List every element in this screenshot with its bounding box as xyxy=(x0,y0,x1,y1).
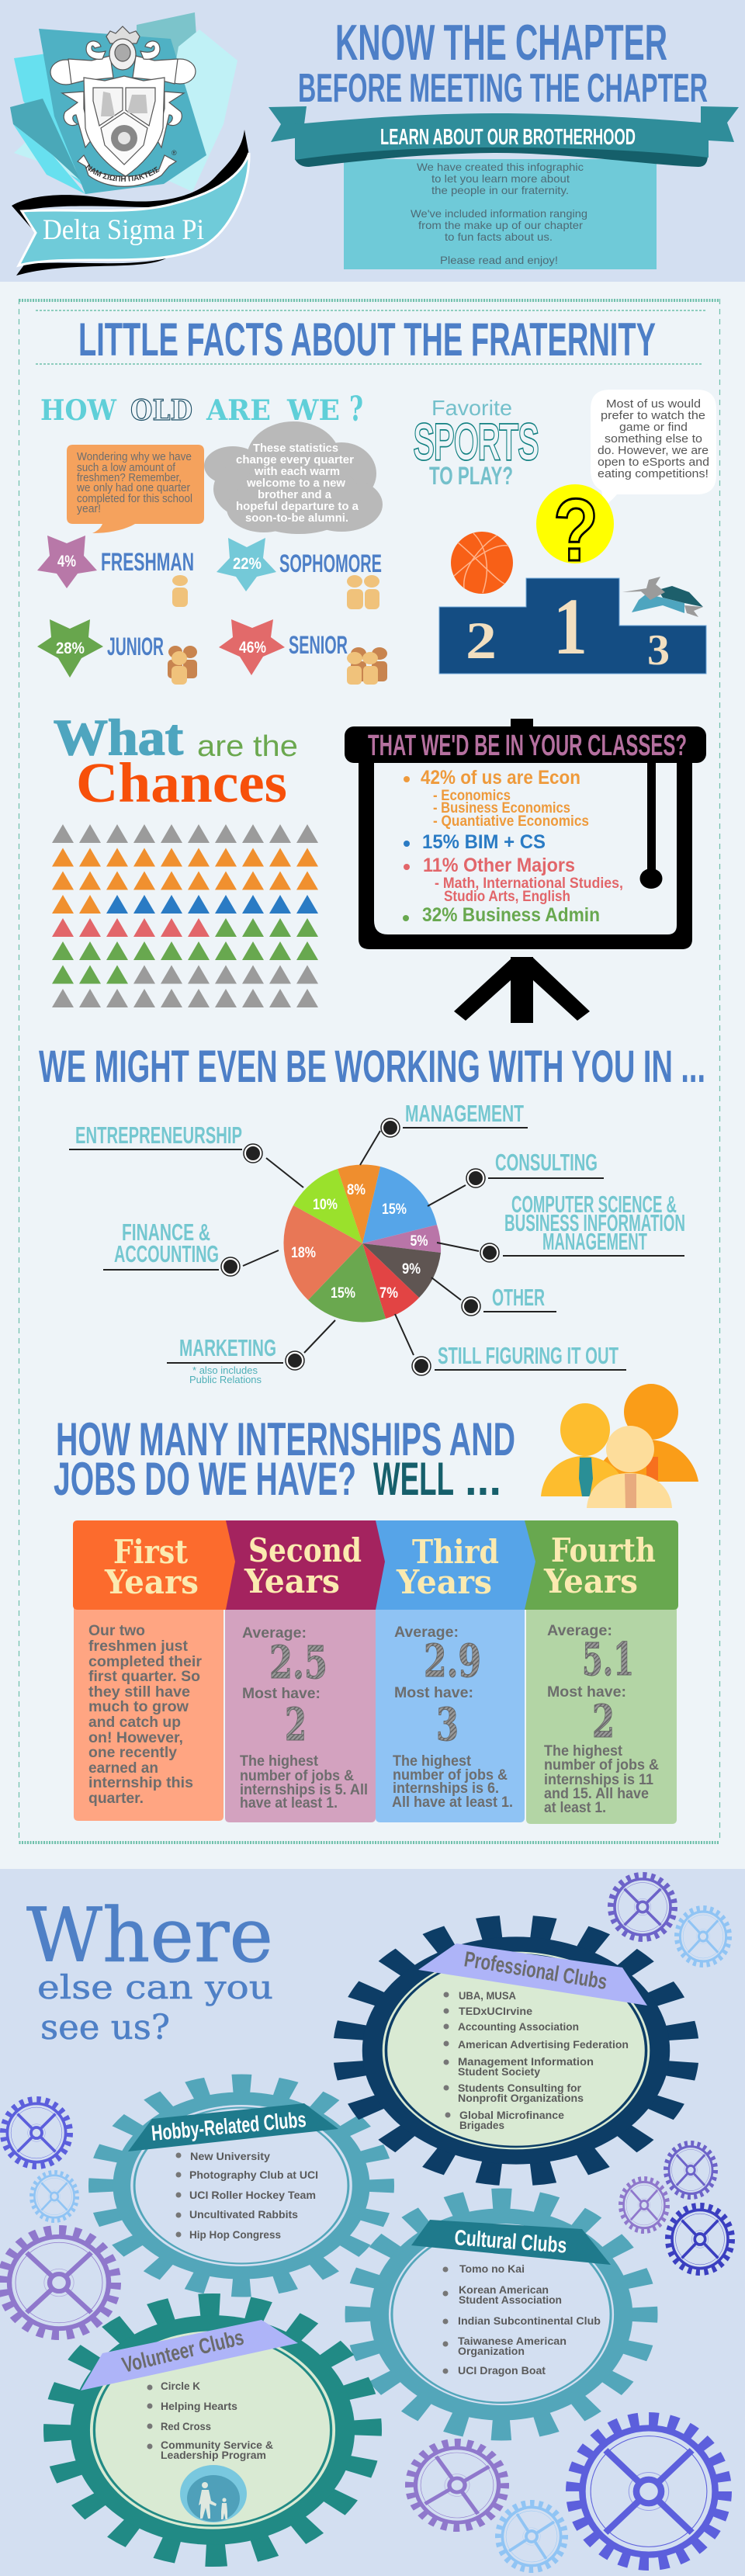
connector: marketing: MARKETING xyxy=(179,1334,276,1361)
icon: question mark: ? xyxy=(553,481,598,580)
callout: freshmen note: year! xyxy=(77,502,101,515)
list: cultural clubs: Organization xyxy=(458,2345,525,2357)
banner: hobby-related clubs xyxy=(128,2103,338,2151)
panel: fourth years: internships is 11 xyxy=(544,1772,653,1788)
logo backing shards xyxy=(10,12,237,194)
list: hobby clubs: Uncultivated Rabbits xyxy=(189,2208,298,2221)
connector: finance: ACCOUNTING xyxy=(114,1240,219,1267)
intro text box xyxy=(344,159,657,269)
gear: small lavender right xyxy=(621,2179,667,2231)
chart: career pie: 8% xyxy=(347,1182,366,1198)
stat: freshman 4%: 4% xyxy=(57,553,76,570)
list: cultural clubs: Tomo no Kai xyxy=(459,2262,525,2275)
crest mantling left xyxy=(50,41,113,147)
banner text: Delta Sigma Pi xyxy=(43,214,204,246)
list: professional clubs: Students Consulting for xyxy=(458,2082,582,2094)
teal banner xyxy=(19,153,249,265)
heading: how old are we: ARE xyxy=(206,394,271,427)
registered mark: ® xyxy=(172,149,177,157)
heading: favorite sports to play: TO PLAY? xyxy=(429,462,513,490)
panel: first years: one recently xyxy=(88,1745,177,1761)
list: professional clubs: Student Society xyxy=(458,2065,540,2078)
chart: career pie: 18% xyxy=(291,1245,316,1261)
panel: first years: internship this xyxy=(88,1775,193,1791)
list: professional clubs: TEDxUCIrvine xyxy=(459,2005,532,2017)
panel: fourth years: The highest xyxy=(544,1743,623,1760)
panel: fourth years: number of jobs & xyxy=(544,1757,659,1773)
panel: first years: on! However, xyxy=(88,1730,183,1746)
panel: fourth years: Fourth xyxy=(551,1531,656,1569)
panel: second years xyxy=(225,1520,385,1822)
callout: freshmen note: completed for this school xyxy=(77,492,192,505)
heading: internships and jobs: HOW MANY INTERNSHIPS AND xyxy=(56,1413,515,1465)
gear: small light blue left xyxy=(32,2172,77,2221)
gear: lavender left xyxy=(2,2231,116,2335)
icon: one person xyxy=(172,575,188,607)
panel: fourth years: Average: xyxy=(547,1623,612,1639)
other majors: - Math, International Studies, xyxy=(435,875,623,892)
callout: freshmen note xyxy=(67,445,204,533)
chart: podium xyxy=(439,578,706,674)
heading: where else can you see us: see us? xyxy=(40,2008,170,2047)
list: professional clubs: Management Information xyxy=(458,2055,594,2068)
panel: first years: first quarter. So xyxy=(88,1669,200,1685)
heading: how old are we: HOW xyxy=(40,394,117,427)
callout: statistics cloud: hopeful departure to a xyxy=(236,500,359,513)
gear: small purple top right xyxy=(611,1875,674,1939)
gear: lavender bottom xyxy=(401,2435,513,2536)
connector: marketing: * also includes xyxy=(192,1364,258,1376)
panel: first years: First xyxy=(113,1533,189,1571)
chart: career pie: 10% xyxy=(313,1197,338,1213)
icon: athletes xyxy=(622,577,703,617)
callout: watch the game: game or find xyxy=(619,421,688,434)
panel: second years: internships is 5. All xyxy=(240,1782,368,1798)
intro text box: Please read and enjoy! xyxy=(440,254,558,266)
panel: third years: All have at least 1. xyxy=(392,1794,513,1811)
panel: first years: Our two xyxy=(88,1623,145,1639)
black swoosh xyxy=(12,130,249,237)
callout: watch the game: eating competitions! xyxy=(598,467,709,480)
panel: little facts background xyxy=(0,282,745,1869)
chart: podium: 1 xyxy=(553,582,587,671)
icon: three people xyxy=(168,646,197,685)
heading: favorite sports to play: SPORTS xyxy=(414,415,539,470)
panel: third years: 3 xyxy=(436,1698,459,1751)
panel: third years: Years xyxy=(396,1563,492,1601)
stat: freshman 4% xyxy=(37,536,194,607)
callout: freshmen note: such a low amount of xyxy=(77,461,176,474)
panel: third years: 2.9 xyxy=(424,1635,481,1687)
connector: marketing: Public Relations xyxy=(189,1374,262,1385)
crest mantling right xyxy=(133,41,196,147)
connector: consulting: CONSULTING xyxy=(495,1149,598,1176)
panel: first years: earned an xyxy=(88,1760,158,1777)
heading: how old are we: OLD xyxy=(130,394,192,427)
ribbon: learn about our brotherhood xyxy=(269,106,739,167)
callout: statistics cloud: welcome to a new xyxy=(246,477,345,490)
panel: third years: Most have: xyxy=(394,1685,473,1701)
panel: first years xyxy=(73,1520,235,1821)
gear: light blue bottom xyxy=(492,2497,571,2576)
other majors: 11% Other Majors xyxy=(423,855,575,876)
panel: second years: Second xyxy=(248,1531,362,1569)
callout: statistics cloud xyxy=(204,421,383,534)
list: professional clubs xyxy=(444,1989,629,2131)
chart: podium: 2 xyxy=(466,611,497,670)
banner: professional clubs xyxy=(418,1943,647,2006)
list: professional clubs: UBA, MUSA xyxy=(459,1989,516,2002)
panel: second years: have at least 1. xyxy=(240,1795,338,1812)
callout: watch the game: something else to xyxy=(605,432,702,446)
list: hobby clubs xyxy=(175,2150,318,2241)
list: professional clubs: Global Microfinance xyxy=(459,2109,564,2121)
callout: watch the game: Most of us would xyxy=(606,397,701,411)
connector: computer science xyxy=(437,1191,685,1262)
list: volunteer clubs: Red Cross xyxy=(161,2420,211,2432)
list: hobby clubs: New University xyxy=(190,2150,270,2162)
list: majors xyxy=(403,767,623,926)
lower swoosh xyxy=(16,258,166,276)
econ majors: - Business Economics xyxy=(433,800,570,816)
callout: statistics cloud: brother and a xyxy=(258,488,332,501)
stat: sophomore 22%: SOPHOMORE xyxy=(279,550,382,577)
other majors: Studio Arts, English xyxy=(444,889,570,905)
panel: fourth years: at least 1. xyxy=(544,1800,606,1816)
gear: volunteer clubs xyxy=(59,2306,366,2554)
intro text box: the people in our fraternity. xyxy=(431,184,569,196)
panel: third years: internships is 6. xyxy=(393,1780,499,1797)
gear: hobby-related clubs xyxy=(102,2084,380,2287)
heading: internships and jobs: WELL xyxy=(373,1453,454,1505)
heading: what are the chances: are the xyxy=(197,730,298,763)
list: hobby clubs: Photography Club at UCI xyxy=(189,2169,318,2181)
heading: internships and jobs xyxy=(54,1413,515,1505)
connector: still figuring it out: STILL FIGURING IT OUT xyxy=(438,1342,619,1369)
list: professional clubs: American Advertising Federation xyxy=(458,2038,629,2051)
panel: fourth years: Most have: xyxy=(547,1684,626,1701)
panel: first years: they still have xyxy=(88,1684,190,1701)
callout: statistics cloud: change every quarter xyxy=(236,453,354,466)
connector: management: MANAGEMENT xyxy=(405,1100,524,1127)
heading: internships and jobs: JOBS DO WE HAVE? xyxy=(54,1453,356,1505)
gear: large blue bottom right xyxy=(573,2419,724,2564)
stat: sophomore 22%: 22% xyxy=(233,555,262,573)
panel: first years: much to grow xyxy=(88,1699,189,1715)
intro text box: We have created this infographic xyxy=(417,161,584,173)
panel: second years: The highest xyxy=(240,1753,319,1770)
connector: finance: FINANCE & xyxy=(122,1219,210,1246)
stat: freshman 4%: FRESHMAN xyxy=(101,548,194,576)
list: professional clubs: Brigades xyxy=(459,2119,504,2131)
panel: fourth years: Years xyxy=(543,1562,638,1600)
gear: volunteer clubs: Volunteer Clubs xyxy=(120,2325,246,2377)
heading: where else can you see us xyxy=(26,1892,273,2047)
connector: finance xyxy=(103,1219,279,1276)
connector: other xyxy=(431,1278,556,1316)
title xyxy=(298,14,708,111)
stat: sophomore 22% xyxy=(217,538,382,609)
list: cultural clubs: UCI Dragon Boat xyxy=(458,2364,546,2377)
panel: first years: and catch up xyxy=(88,1714,181,1731)
callout: watch the game xyxy=(591,390,716,508)
crest xyxy=(50,26,196,186)
intro text box: to let you learn more about xyxy=(431,172,570,185)
other majors xyxy=(404,855,623,905)
stat: senior 46% xyxy=(219,619,387,685)
panel: second years: 2 xyxy=(285,1698,307,1751)
list: volunteer clubs xyxy=(147,2380,273,2461)
panel: first years: completed their xyxy=(88,1654,203,1670)
panel: first years: Years xyxy=(104,1563,199,1601)
heading: how old are we xyxy=(40,390,363,429)
gear: small indigo right xyxy=(668,2206,732,2273)
icon: parent and child xyxy=(180,2465,247,2522)
callout: statistics cloud: with each warm xyxy=(254,465,340,478)
icon: question mark xyxy=(536,481,614,580)
connector: other: OTHER xyxy=(492,1284,545,1311)
list: cultural clubs: Taiwanese American xyxy=(458,2335,567,2347)
panel: fourth years: and 15. All have xyxy=(544,1786,649,1802)
chart: career pie: 7% xyxy=(379,1285,398,1302)
list: professional clubs: Accounting Association xyxy=(458,2020,579,2033)
icon: basketball xyxy=(451,532,513,594)
panel: second years: Average: xyxy=(242,1625,307,1642)
heading: favorite sports to play xyxy=(414,396,539,490)
panel: third years: Third xyxy=(412,1533,499,1571)
intro text box: from the make up of our chapter xyxy=(418,219,583,231)
stat: junior 28% xyxy=(37,619,197,685)
gear: professional clubs: Professional Clubs xyxy=(463,1947,609,1994)
callout: watch the game: do. However, we are xyxy=(598,444,709,457)
stat: junior 28%: JUNIOR xyxy=(107,633,164,660)
panel: second years: 2.5 xyxy=(269,1636,327,1689)
heading: what are the chances xyxy=(54,709,298,814)
gear: hobby-related clubs: Hobby-Related Clubs xyxy=(151,2107,307,2145)
chart: career pie: 5% xyxy=(410,1233,428,1250)
heading: what are the chances: Chances xyxy=(76,751,287,814)
heading: how old are we: ? xyxy=(349,390,363,429)
icon: two people xyxy=(347,575,379,609)
callout: watch the game: open to eSports and xyxy=(598,456,709,469)
list: volunteer clubs: Community Service & xyxy=(161,2439,273,2451)
heading: what are the chances: What xyxy=(54,709,183,766)
panel: fourth years: 2 xyxy=(592,1695,615,1748)
gear: cultural clubs xyxy=(359,2200,643,2429)
chart: triangle pictogram xyxy=(52,824,318,1007)
gear: professional clubs xyxy=(349,1927,683,2174)
connector: management xyxy=(360,1100,528,1165)
callout: statistics cloud: These statistics xyxy=(253,442,338,455)
connector: computer science: MANAGEMENT xyxy=(542,1228,647,1255)
icon: group of people xyxy=(541,1384,698,1508)
list: volunteer clubs: Helping Hearts xyxy=(161,2400,237,2412)
panel: fourth years xyxy=(525,1520,678,1824)
panel: third years: The highest xyxy=(393,1753,472,1770)
gear: small purple right xyxy=(666,2143,716,2197)
panel: third years: number of jobs & xyxy=(393,1767,508,1784)
chart: career pie: 15% xyxy=(331,1285,355,1302)
econ majors: - Quantiative Economics xyxy=(433,813,589,830)
list: hobby clubs: UCI Roller Hockey Team xyxy=(189,2189,316,2201)
bim and cs: 15% BIM + CS xyxy=(422,831,546,853)
intro text box: We've included information ranging xyxy=(411,207,587,220)
panel: second years: number of jobs & xyxy=(240,1768,354,1784)
callout: freshmen note: Wondering why we have xyxy=(77,450,192,463)
connector: marketing xyxy=(167,1320,335,1385)
list: cultural clubs: Indian Subcontinental Club xyxy=(458,2314,601,2327)
logo: Delta Sigma Pi crest and banner xyxy=(10,12,250,276)
gear: cultural clubs: Cultural Clubs xyxy=(454,2225,567,2258)
panel: second years: Years xyxy=(244,1562,340,1600)
econ majors xyxy=(404,767,589,830)
list: hobby clubs: Hip Hop Congress xyxy=(189,2228,281,2241)
list: professional clubs: Nonprofit Organizations xyxy=(458,2092,584,2104)
list: volunteer clubs: Circle K xyxy=(161,2380,200,2392)
connector: still figuring it out xyxy=(395,1314,626,1375)
list: cultural clubs: Korean American xyxy=(459,2283,549,2296)
callout: freshmen note: freshmen? Remember, xyxy=(77,471,182,484)
callout: freshmen note: we only had one quarter xyxy=(76,481,190,494)
stat: senior 46%: 46% xyxy=(239,639,266,657)
heading: favorite sports to play: Favorite xyxy=(431,396,512,420)
connector: entrepreneurship xyxy=(69,1122,303,1187)
connector: entrepreneurship: ENTREPRENEURSHIP xyxy=(75,1122,242,1149)
heading: internships and jobs: ... xyxy=(465,1453,501,1505)
banner: volunteer clubs xyxy=(81,2320,298,2391)
econ majors: - Economics xyxy=(433,788,511,804)
panel: fourth years: 5.1 xyxy=(582,1633,634,1686)
heading: favorite sports to play: SPORTS xyxy=(414,415,539,470)
list: volunteer clubs: Leadership Program xyxy=(161,2449,266,2461)
gear: small light blue top right xyxy=(677,1909,729,1964)
gear: small blue left xyxy=(3,2099,70,2166)
stat: junior 28%: 28% xyxy=(56,640,85,657)
list: cultural clubs xyxy=(442,2262,601,2377)
crest motto: ΝΑΜ ΣΙΩΠΗ ΠΑΚΤΕΙΣ xyxy=(85,164,160,182)
icon: four people xyxy=(347,647,387,685)
list: cultural clubs: Student Association xyxy=(459,2293,562,2306)
heading: where else can you see us: Where xyxy=(26,1892,273,1979)
icon: presentation board xyxy=(345,719,706,1023)
connector: consulting xyxy=(428,1149,604,1206)
banner: cultural clubs xyxy=(411,2220,611,2265)
panel: first years: quarter. xyxy=(88,1791,144,1807)
intro text box: to fun facts about us. xyxy=(445,231,553,243)
heading: where else can you see us: else can you xyxy=(37,1968,273,2006)
chart: career pie xyxy=(283,1165,441,1322)
panel: first years: freshmen just xyxy=(88,1638,189,1655)
panel: third years xyxy=(376,1520,535,1822)
chart: podium: 3 xyxy=(647,626,670,674)
callout: watch the game: prefer to watch the xyxy=(601,409,705,422)
chart: career pie: 9% xyxy=(402,1261,421,1278)
stat: senior 46%: SENIOR xyxy=(289,631,348,659)
panel: second years: Most have: xyxy=(242,1686,321,1702)
panel: third years: Average: xyxy=(394,1624,459,1641)
business admin: 32% Business Admin xyxy=(422,904,600,926)
chart: career pie: 15% xyxy=(382,1201,407,1218)
heading: how old are we: WE xyxy=(286,394,340,427)
callout: statistics cloud: soon-to-be alumni. xyxy=(245,511,348,525)
econ majors: 42% of us are Econ xyxy=(421,767,580,789)
